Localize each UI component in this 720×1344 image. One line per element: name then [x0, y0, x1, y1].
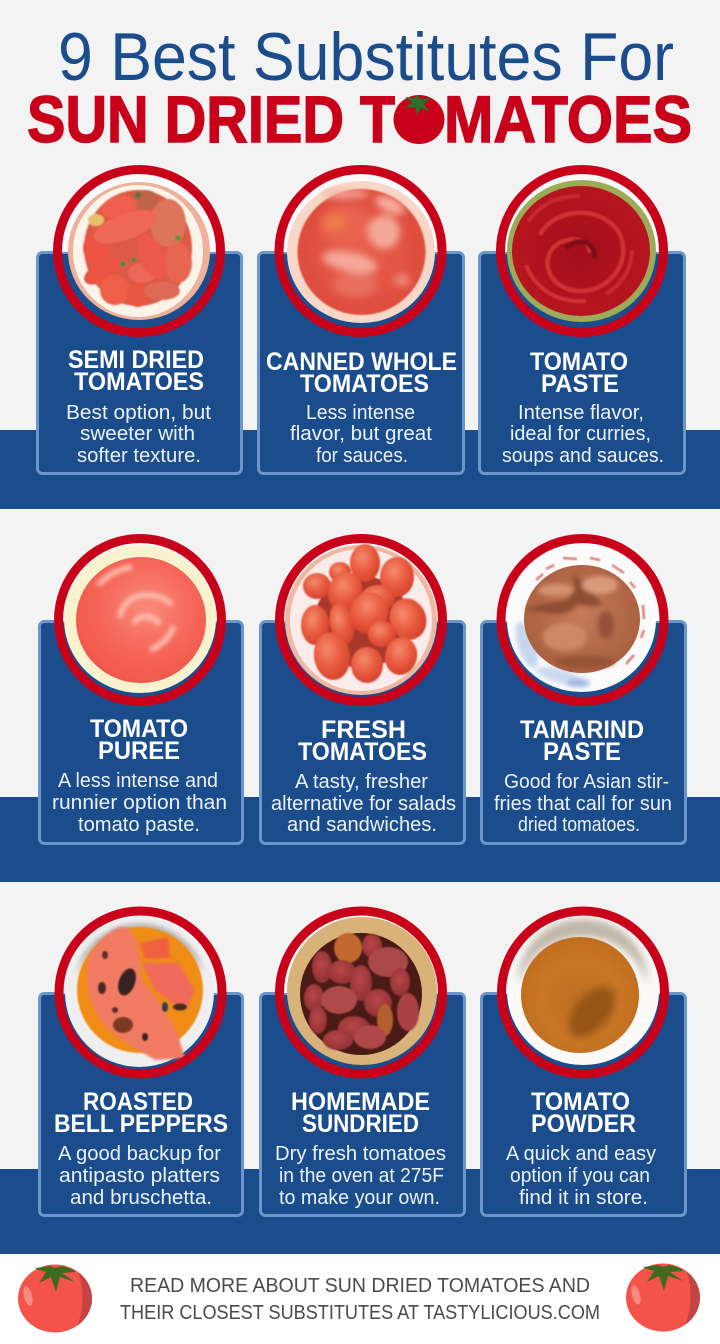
- blue band: row 1: [0, 430, 720, 509]
- heading: POWDER: [531, 1110, 636, 1138]
- heading: BELL PEPPERS: [54, 1110, 228, 1138]
- description: [506, 1143, 656, 1209]
- description: [502, 402, 664, 467]
- panel: homemade sundried: [260, 911, 464, 1216]
- description: [494, 771, 672, 836]
- icon: bowl of tomato powder: [506, 916, 660, 1065]
- description: ideal for curries,: [510, 423, 651, 445]
- description: Good for Asian stir-: [504, 771, 669, 793]
- description: and sandwiches.: [287, 814, 437, 836]
- description: in the oven at 275F: [279, 1165, 444, 1187]
- icon: wooden bowl of homemade sundried tomatoes: [284, 916, 438, 1065]
- description: antipasto platters: [59, 1165, 220, 1187]
- footer background: [0, 1254, 720, 1344]
- ring: [502, 911, 664, 1074]
- card: [482, 622, 686, 844]
- description: flavor, but great: [290, 423, 432, 445]
- description: A less intense and: [58, 770, 218, 792]
- heading: [520, 716, 644, 766]
- footer text: READ MORE ABOUT SUN DRIED TOMATOES AND: [130, 1275, 590, 1297]
- heading: [266, 348, 457, 398]
- footer text: THEIR CLOSEST SUBSTITUTES AT TASTYLICIOUS.COM: [120, 1302, 600, 1324]
- heading: TOMATO: [530, 348, 628, 376]
- description: dried tomatoes.: [518, 814, 640, 836]
- description: [58, 1143, 221, 1209]
- blue band: row 2: [0, 797, 720, 882]
- card: [260, 622, 464, 844]
- footer text: [120, 1275, 600, 1324]
- icon: footer tomato right: [626, 1261, 702, 1333]
- panel: tomato powder: [482, 911, 686, 1216]
- ring: [501, 538, 664, 702]
- card: [258, 252, 464, 474]
- panel: tomato puree: [40, 538, 242, 844]
- heading: CANNED WHOLE: [266, 348, 457, 376]
- icon: plate of fresh tomatoes: [284, 544, 438, 695]
- panel: fresh tomatoes: [260, 538, 464, 844]
- icon: bowl of canned tomatoes: [284, 175, 438, 323]
- title line 2: SUN DRIED: [27, 82, 344, 156]
- card: [40, 622, 242, 844]
- heading: TOMATO: [531, 1088, 630, 1116]
- title: [27, 19, 692, 156]
- heading: [68, 346, 204, 396]
- description: [275, 1143, 446, 1209]
- description: option if you can: [510, 1165, 650, 1187]
- heading: FRESH: [321, 716, 406, 744]
- ring: [280, 538, 442, 702]
- card: [260, 994, 464, 1216]
- heading: TOMATOES: [74, 368, 204, 396]
- ring: [279, 170, 442, 332]
- description: find it in store.: [519, 1187, 648, 1209]
- ring: [59, 911, 222, 1074]
- heading: ROASTED: [83, 1088, 193, 1116]
- panel: semi dried tomatoes: [38, 170, 242, 474]
- description: Best option, but: [66, 402, 211, 424]
- heading: TAMARIND: [520, 716, 644, 744]
- heading: [298, 716, 427, 766]
- description: [271, 771, 456, 836]
- icon: bowl of tomato paste: [505, 175, 659, 322]
- description: [66, 402, 211, 467]
- heading: PASTE: [541, 370, 619, 398]
- panel: roasted bell peppers: [40, 911, 242, 1216]
- description: tomato paste.: [78, 814, 200, 836]
- heading: TOMATOES: [298, 738, 427, 766]
- icon: title tomato: [394, 95, 444, 144]
- heading: PASTE: [543, 738, 621, 766]
- heading: PUREE: [98, 737, 180, 765]
- heading: [90, 715, 188, 765]
- description: Intense flavor,: [518, 402, 644, 424]
- card: [480, 252, 684, 474]
- description: and bruschetta.: [70, 1187, 212, 1209]
- heading: SEMI DRIED: [68, 346, 204, 374]
- icon: footer tomato left: [18, 1262, 94, 1334]
- description: [52, 770, 227, 836]
- ring: [500, 170, 664, 332]
- description: sweeter with: [80, 423, 195, 445]
- icon: bowl of tamarind paste: [506, 544, 660, 692]
- card: [482, 994, 686, 1216]
- ring: [58, 170, 220, 332]
- description: A quick and easy: [506, 1143, 656, 1165]
- ring: [280, 911, 442, 1074]
- description: for sauces.: [316, 445, 408, 467]
- description: A good backup for: [58, 1143, 221, 1165]
- heading: HOMEMADE: [291, 1088, 430, 1116]
- card: [40, 994, 242, 1216]
- title line 2: T: [360, 82, 395, 156]
- title line 2: [27, 82, 692, 156]
- heading: TOMATOES: [300, 370, 429, 398]
- description: to make your own.: [279, 1187, 440, 1209]
- description: alternative for salads: [271, 793, 456, 815]
- heading: [531, 1088, 636, 1138]
- icon: bowl of semi dried tomatoes: [62, 175, 216, 320]
- blue band: row 3: [0, 1169, 720, 1254]
- icon: bowl of tomato puree: [63, 544, 217, 693]
- description: runnier option than: [52, 792, 227, 814]
- description: Less intense: [306, 402, 415, 424]
- description: fries that call for sun: [494, 793, 672, 815]
- panel: tamarind paste: [482, 538, 686, 844]
- description: Dry fresh tomatoes: [275, 1143, 446, 1165]
- title line 1: 9 Best Substitutes For: [58, 19, 674, 95]
- heading: [54, 1088, 228, 1138]
- description: softer texture.: [77, 445, 201, 467]
- description: [290, 402, 432, 467]
- card: [38, 252, 242, 474]
- description: soups and sauces.: [502, 445, 664, 467]
- heading: [530, 348, 628, 398]
- heading: TOMATO: [90, 715, 188, 743]
- description: A tasty, fresher: [295, 771, 428, 793]
- panel: tomato paste: [480, 170, 684, 474]
- icon: bowl of roasted bell peppers: [64, 916, 218, 1067]
- title line 2: MATOES: [444, 82, 692, 156]
- heading: SUNDRIED: [302, 1110, 419, 1138]
- panel: canned whole tomatoes: [258, 170, 464, 474]
- ring: [58, 538, 222, 702]
- heading: [291, 1088, 430, 1138]
